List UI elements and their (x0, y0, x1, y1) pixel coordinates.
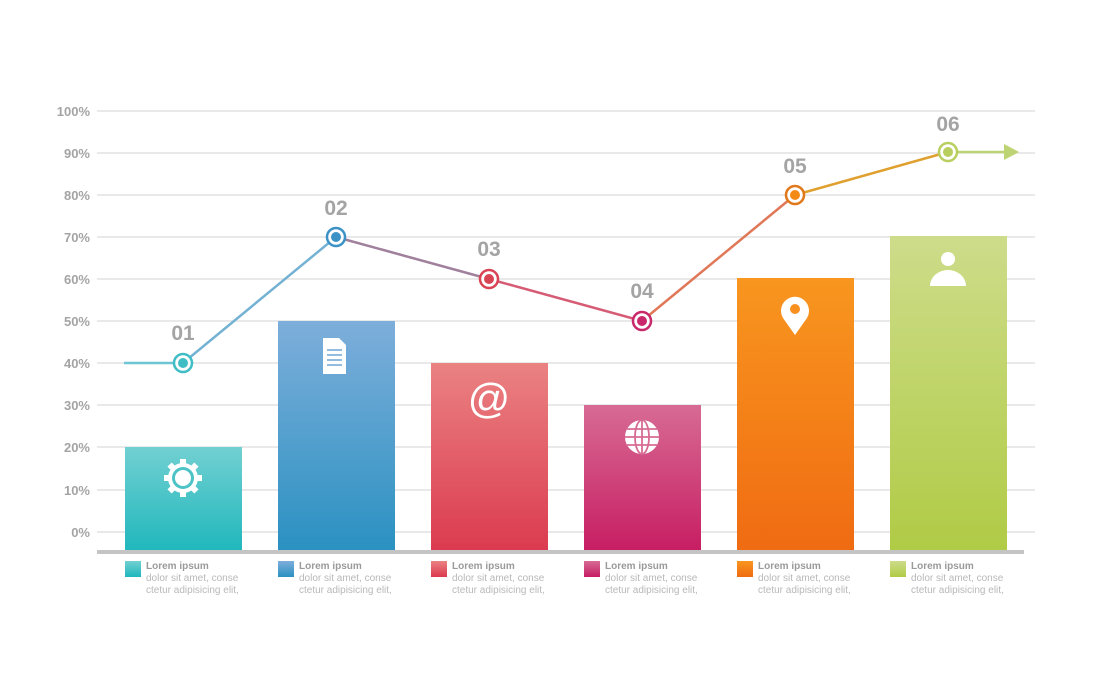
point labels: 02 (324, 197, 348, 220)
legends: ctetur adipisicing elit, (605, 585, 698, 596)
bar 5 (737, 278, 854, 552)
y-axis labels: 10% (64, 483, 90, 498)
legends: dolor sit amet, conse (911, 573, 1004, 584)
icon: at sign: @ (468, 375, 510, 422)
legends: ctetur adipisicing elit, (911, 585, 1004, 596)
y-axis labels (57, 104, 90, 540)
legends: Lorem ipsum (299, 561, 362, 572)
legends: ctetur adipisicing elit, (452, 585, 545, 596)
bar 3 (431, 363, 548, 552)
point labels: 05 (783, 155, 807, 178)
grid lines (97, 111, 1035, 532)
bar 6 (890, 236, 1007, 552)
legends: dolor sit amet, conse (146, 573, 239, 584)
icon: gear (164, 459, 202, 497)
legends: Lorem ipsum (758, 561, 821, 572)
legends: ctetur adipisicing elit, (758, 585, 851, 596)
legends: Lorem ipsum (452, 561, 515, 572)
legends: dolor sit amet, conse (605, 573, 698, 584)
baseline (97, 550, 1024, 554)
icon: person (930, 252, 966, 286)
y-axis labels: 30% (64, 398, 90, 413)
icon: document (323, 338, 346, 374)
y-axis labels: 0% (71, 525, 90, 540)
y-axis labels: 80% (64, 188, 90, 203)
legends: Lorem ipsum (146, 561, 209, 572)
legends: dolor sit amet, conse (758, 573, 851, 584)
arrow head (1004, 144, 1019, 160)
y-axis labels: 70% (64, 230, 90, 245)
y-axis labels: 90% (64, 146, 90, 161)
data points (174, 143, 957, 372)
point labels: 04 (630, 280, 654, 303)
icon: globe (625, 420, 659, 454)
legends: Lorem ipsum (605, 561, 668, 572)
legends (125, 561, 1004, 596)
line chart (124, 152, 1006, 363)
point labels (171, 113, 960, 345)
y-axis labels: 40% (64, 356, 90, 371)
point labels: 06 (936, 113, 960, 136)
bar 1 (125, 447, 242, 552)
bar 2 (278, 321, 395, 552)
legends: dolor sit amet, conse (452, 573, 545, 584)
y-axis labels: 100% (57, 104, 90, 119)
bar 4 (584, 405, 701, 552)
y-axis labels: 60% (64, 272, 90, 287)
point labels: 01 (171, 322, 195, 345)
legends: dolor sit amet, conse (299, 573, 392, 584)
legends: Lorem ipsum (911, 561, 974, 572)
icon: location pin (781, 297, 809, 335)
y-axis labels: 20% (64, 440, 90, 455)
point labels: 03 (477, 238, 501, 261)
legends: ctetur adipisicing elit, (146, 585, 239, 596)
y-axis labels: 50% (64, 314, 90, 329)
legends: ctetur adipisicing elit, (299, 585, 392, 596)
